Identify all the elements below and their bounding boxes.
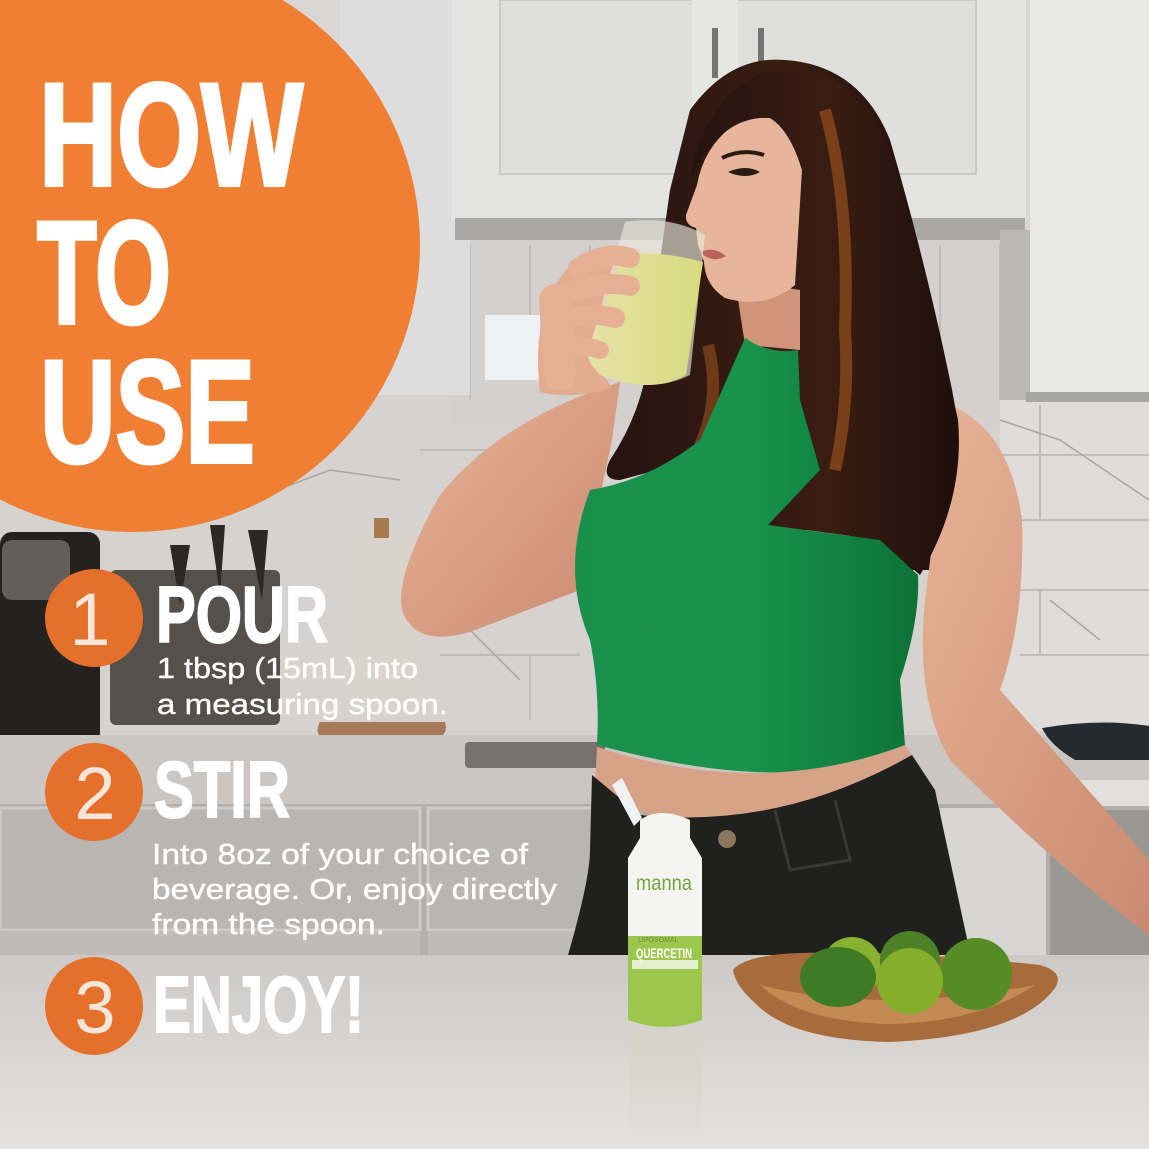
pour instructions: 1 tbsp (15mL) into [157, 653, 418, 685]
appliances and paper towel [0, 518, 446, 747]
number badge 1 [45, 569, 143, 667]
white marble counter [0, 955, 1149, 1149]
title: HOW TO USE: TO [37, 191, 171, 354]
number badge 2 [45, 743, 143, 841]
midriff [595, 745, 915, 821]
lower counter and cabinets [0, 722, 1149, 956]
number badge 1: 1 [69, 578, 111, 661]
heading stir: STIR [154, 745, 290, 834]
orange title circle [0, 0, 420, 532]
backsplash tile wall [0, 225, 1149, 760]
step 1: pour [45, 569, 448, 721]
supplement bottle: manna [636, 872, 692, 895]
stir instructions [152, 839, 558, 941]
heading enjoy: ENJOY! [153, 960, 364, 1049]
glass of green drink [589, 220, 705, 385]
left arm [401, 382, 620, 637]
stir instructions: Into 8oz of your choice of [152, 839, 529, 871]
stir instructions: beverage. Or, enjoy directly [152, 874, 558, 906]
supplement bottle: QUERCETIN [636, 945, 692, 961]
green top [575, 338, 918, 772]
title: HOW TO USE [37, 53, 303, 493]
back hair [607, 60, 959, 570]
heading pour: POUR [156, 570, 328, 659]
step 3: enjoy [45, 957, 364, 1055]
upper cabinets [340, 0, 1149, 402]
stir instructions: from the spoon. [152, 909, 385, 941]
number badge 3: 3 [74, 966, 116, 1049]
black jeans [566, 755, 972, 962]
pour instructions [157, 653, 448, 721]
number badge 2: 2 [74, 752, 116, 835]
supplement bottle [612, 778, 702, 1027]
pour instructions: a measuring spoon. [157, 689, 448, 721]
front hair [690, 68, 959, 575]
woman drinking [401, 60, 1149, 962]
number badge 3 [45, 957, 143, 1055]
neck and shoulders [735, 280, 800, 350]
wooden bowl of limes [733, 931, 1058, 1042]
fingers [555, 256, 630, 375]
supplement bottle: LIPOSOMAL [638, 937, 679, 944]
title: HOW TO USE: USE [40, 330, 255, 493]
right arm [923, 405, 1149, 935]
title: HOW TO USE: HOW [39, 53, 303, 216]
face [686, 118, 802, 302]
step 2: stir [45, 743, 558, 941]
